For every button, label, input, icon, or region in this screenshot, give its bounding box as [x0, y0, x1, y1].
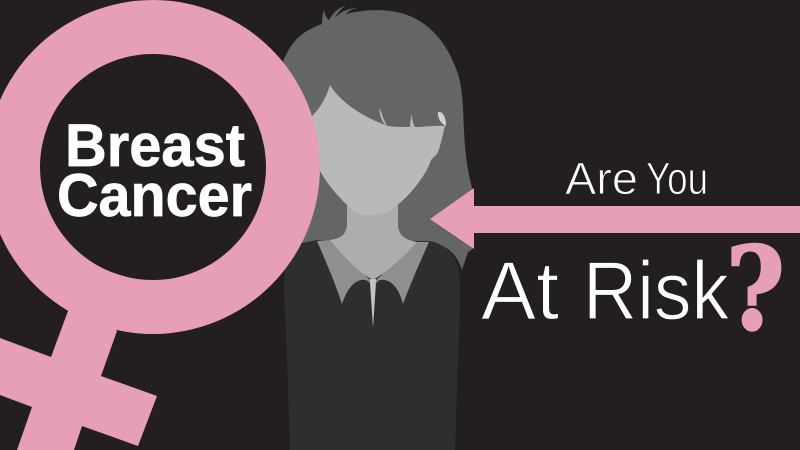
collar: [317, 240, 429, 327]
ring heading: [57, 112, 252, 229]
ear: [438, 112, 446, 126]
shirt placket: [370, 279, 376, 327]
woman figure: [270, 6, 474, 450]
heading: Cancer: Cancer: [57, 162, 252, 229]
neck: [330, 200, 417, 280]
arrow pointing at woman: [430, 188, 800, 249]
symbol stem and crossbar: [0, 300, 157, 450]
text: At Risk: Risk: [583, 244, 729, 337]
symbol ring: [0, 0, 320, 334]
text: Are You: Are: [565, 153, 638, 204]
text: Are You: You: [646, 153, 708, 204]
heading: Breast: Breast: [65, 112, 245, 179]
body: [284, 240, 460, 450]
face: [310, 85, 445, 215]
pink question mark: ?: [726, 223, 785, 357]
hair: [270, 6, 474, 270]
female symbol: [0, 0, 320, 450]
text: At Risk: At: [481, 244, 559, 337]
